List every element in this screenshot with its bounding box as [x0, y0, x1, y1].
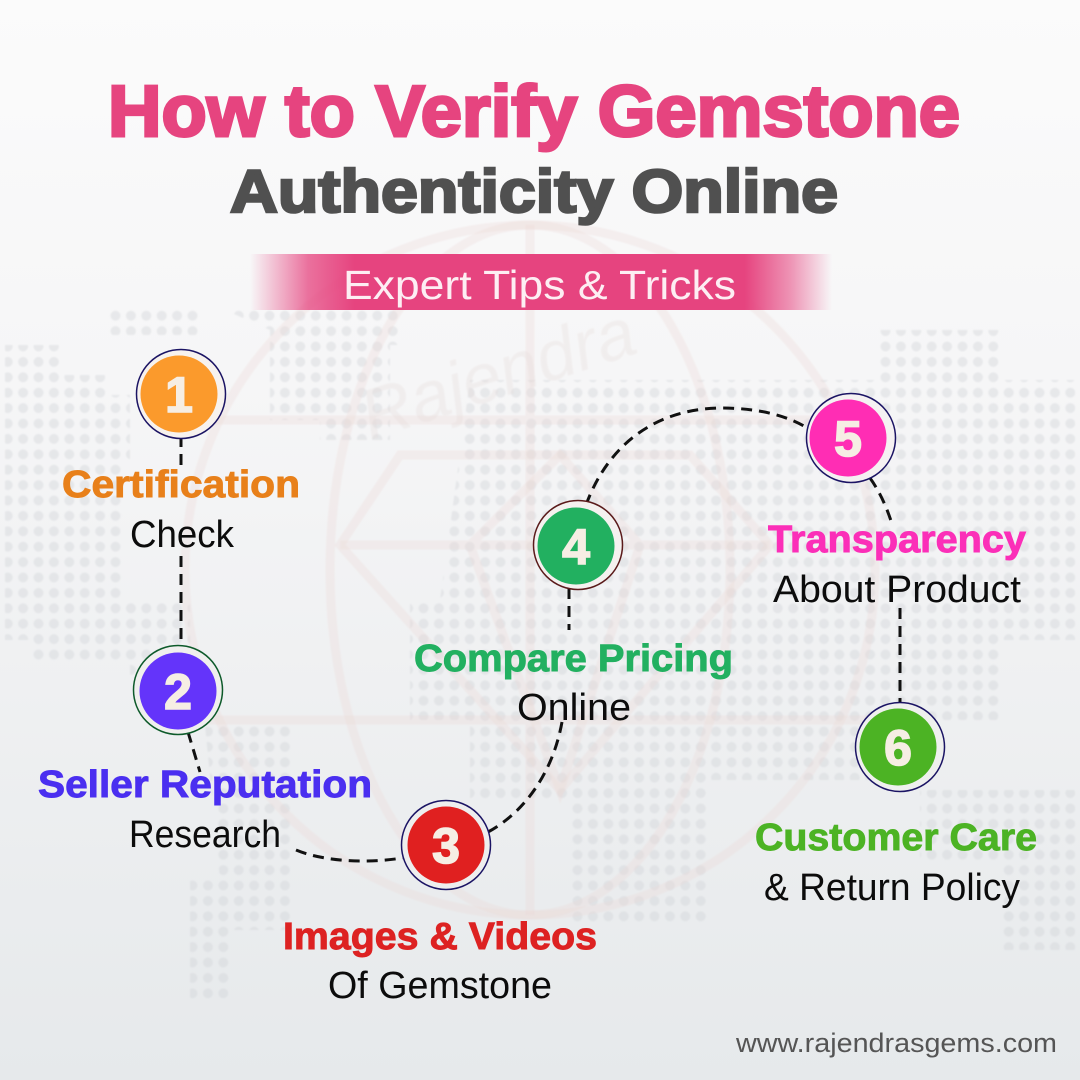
step 4: Compare Pricing [414, 638, 733, 680]
step 1: 1 [165, 367, 193, 423]
step 6: Customer Care [755, 817, 1037, 859]
step 3: Of Gemstone [328, 965, 552, 1007]
step 4 [414, 500, 733, 729]
step 4: Online [517, 687, 631, 729]
step 5: About Product [773, 569, 1021, 611]
step 3: 3 [432, 818, 460, 874]
watermark script: Rajendra [351, 292, 645, 454]
subtitle banner [250, 254, 832, 310]
title [108, 72, 960, 225]
step 1 [62, 350, 300, 556]
step 2: Research [129, 814, 281, 856]
step 1: Check [130, 514, 235, 556]
website url: www.rajendrasgems.com [735, 1028, 1057, 1058]
step 6: 6 [884, 720, 912, 776]
subtitle banner: Expert Tips & Tricks [343, 262, 736, 308]
title: Authenticity Online [230, 158, 838, 225]
step 5: Transparency [768, 519, 1026, 561]
step 5 [768, 394, 1026, 611]
step 3: Images & Videos [283, 916, 597, 958]
step 2: 2 [164, 664, 192, 720]
title: How to Verify Gemstone [108, 72, 960, 152]
step 6 [755, 702, 1037, 909]
step 3 [283, 800, 597, 1007]
dashed connector path [181, 408, 900, 861]
step 1: Certification [62, 464, 300, 506]
step 5: 5 [834, 411, 862, 467]
step 4: 4 [562, 519, 590, 575]
watermark: globe and diamond logo [185, 225, 875, 915]
dotted world map [5, 310, 1075, 1000]
step 6: & Return Policy [764, 867, 1020, 909]
step 2: Seller Reputation [38, 764, 372, 806]
step 2 [38, 646, 372, 856]
